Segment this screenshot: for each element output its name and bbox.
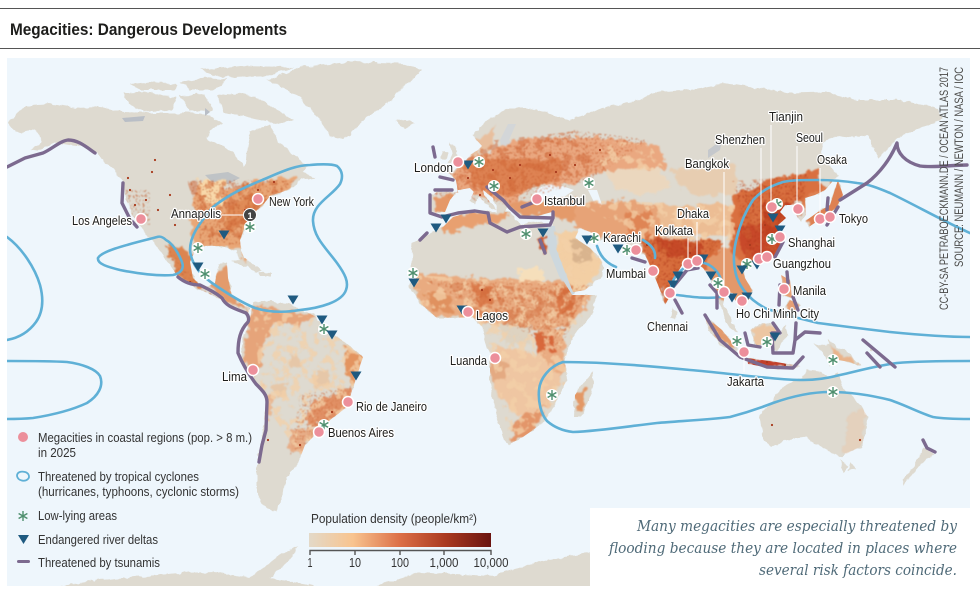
callout: several risk factors coincide. — [759, 563, 957, 579]
tsunami: Sunda arc — [705, 315, 803, 368]
tsunami: Solomons — [863, 340, 895, 367]
colour scale: population density: 1 — [308, 556, 313, 570]
Middle East and Central Asia — [510, 196, 578, 224]
cyclone zone: Southern Indian Ocean and Australia — [539, 361, 970, 432]
density cells: dark patches — [187, 131, 807, 331]
tsunami: Bay of Bengal arc — [673, 268, 717, 313]
credits — [939, 67, 966, 310]
cyclone arc: Bay of Bengal — [670, 263, 722, 298]
cyclone zone: North-west Pacific and South-east Asia — [734, 180, 970, 337]
tsunami: New Zealand — [923, 440, 935, 452]
legend — [17, 431, 252, 570]
icons: endangered river deltas — [192, 160, 786, 380]
city labels: New York — [269, 195, 315, 209]
cyclone zones — [7, 164, 970, 432]
S America — [243, 305, 318, 378]
city labels: Seoul — [796, 131, 823, 145]
city labels: Luanda — [450, 354, 487, 368]
city labels: Kolkata — [655, 224, 693, 238]
colour scale: population density: Population density (people/km²) — [311, 512, 477, 526]
tsunami: US west coast — [122, 183, 137, 227]
credits: SOURCE: NEUMANN / NEWTON / NASA / IOC — [954, 67, 966, 267]
cyclone arc: Pacific west — [7, 237, 42, 340]
Europe and Russia — [470, 125, 495, 155]
callout — [590, 508, 980, 593]
population density — [125, 125, 868, 455]
tsunami: Indonesian arcs — [745, 323, 820, 353]
city labels: Buenos Aires — [328, 426, 394, 440]
tsunami: Atlantic Europe and North Africa — [420, 147, 488, 240]
Oceania — [842, 405, 868, 455]
icons: low-lying areas — [192, 156, 839, 431]
legend item: low-lying areas: Low-lying areas — [38, 509, 117, 523]
colour scale: population density: 100 — [391, 556, 409, 570]
Africa — [438, 212, 510, 235]
callout: flooding because they are located in places where — [608, 541, 957, 557]
city labels: London — [414, 161, 453, 175]
credits: CC-BY-SA PETRABOECKMANN.DE / OCEAN ATLAS 2017 — [939, 67, 951, 310]
legend item: cyclones — [17, 470, 239, 499]
city labels: Shenzhen — [715, 133, 765, 147]
colour scale: population density: 1,000 — [430, 556, 459, 570]
city labels: Osaka — [817, 153, 847, 167]
density speckle — [125, 130, 810, 455]
Maritime South-East Asia — [706, 320, 735, 350]
N America — [190, 178, 297, 265]
city labels: Rio de Janeiro — [356, 400, 427, 414]
cyclone arc: Arabian Sea — [597, 240, 655, 267]
city labels: Dhaka — [677, 207, 709, 221]
city labels: Istanbul — [544, 194, 585, 208]
city labels: Manila — [793, 284, 826, 298]
colour scale: population density: 10,000 — [474, 556, 509, 570]
city labels: Lagos — [476, 309, 508, 323]
legend item: cyclones: (hurricanes, typhoons, cyclonic storms) — [38, 485, 239, 499]
marker: Annapolis badge: 1 — [247, 211, 253, 222]
city labels: Mumbai — [606, 267, 646, 281]
city labels: Lima — [222, 370, 247, 384]
legend item: megacities — [18, 431, 252, 460]
colour scale: population density: 10 — [349, 556, 361, 570]
legend item: megacities: in 2025 — [38, 446, 76, 460]
leader lines — [222, 125, 820, 372]
city labels: Jakarta — [727, 375, 764, 389]
city labels: Bangkok — [685, 157, 730, 171]
cyclone arc: South Pacific — [7, 361, 101, 419]
top rule — [0, 8, 980, 9]
colour scale: population density — [308, 512, 509, 570]
tsunami: Ryukyu — [775, 242, 783, 257]
legend item: tsunamis: Threatened by tsunamis — [38, 556, 160, 570]
marker: Annapolis badge — [244, 208, 256, 222]
density dots — [128, 150, 860, 445]
city labels: Los Angeles — [72, 214, 132, 228]
city labels: Annapolis — [171, 207, 221, 221]
East Asia — [730, 170, 825, 268]
South Asia — [640, 238, 722, 310]
tsunami: Mediterranean — [487, 187, 553, 253]
cyclone loop: east Pacific — [98, 237, 183, 275]
city labels: Tianjin — [769, 110, 803, 124]
tsunami coasts — [7, 140, 967, 462]
legend item: megacities: Megacities in coastal regions (pop. > 8 m.) — [38, 431, 252, 445]
legend item: cyclones: Threatened by tropical cyclones — [38, 470, 199, 484]
legend item: river deltas: Endangered river deltas — [38, 533, 158, 547]
density cells: pale patches — [252, 140, 735, 455]
title: Megacities: Dangerous Developments — [10, 20, 287, 39]
city labels: Ho Chi Minh City — [736, 307, 820, 321]
tsunami: Alaska — [7, 140, 95, 167]
city labels: Karachi — [603, 231, 641, 245]
tsunami: Philippines — [779, 272, 798, 310]
tsunami: Japan and Kuril-Kamchatka — [827, 143, 967, 225]
city labels: Chennai — [647, 320, 688, 334]
tsunami: Central and South America — [178, 277, 267, 462]
city labels — [72, 110, 868, 440]
cyclone loop: Atlantic — [190, 164, 347, 312]
tsunami: Makran coast — [632, 258, 645, 262]
callout: Many megacities are especially threatened by — [636, 519, 958, 535]
city labels: Shanghai — [788, 236, 835, 250]
megacity markers — [136, 156, 836, 438]
city labels: Tokyo — [839, 212, 868, 226]
city labels: Guangzhou — [773, 257, 831, 271]
